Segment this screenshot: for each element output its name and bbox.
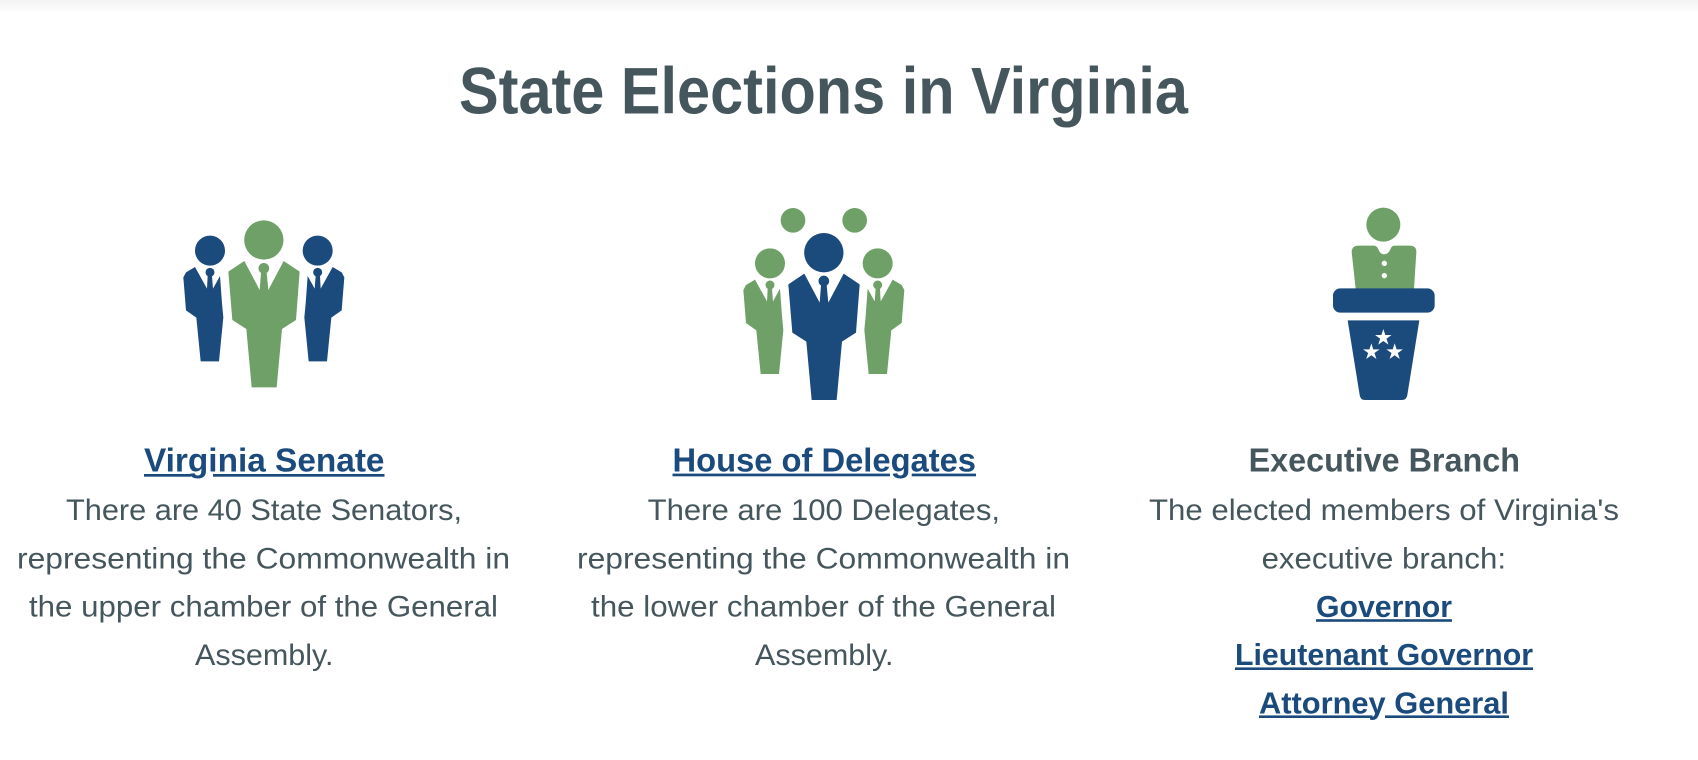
link: Governor: Governor — [1316, 589, 1452, 624]
heading: Virginia Senate link: Virginia Senate — [144, 442, 384, 479]
link: Attorney General: Attorney General — [1259, 685, 1509, 720]
text: House description — [577, 494, 1070, 672]
text: Senate description: the upper chamber of the General — [29, 591, 498, 624]
heading: House of Delegates link: House of Delegates — [672, 442, 976, 479]
heading: Executive Branch: Executive Branch — [1249, 442, 1520, 479]
text: House description: the lower chamber of the General — [591, 591, 1056, 624]
icon: speaker at podium — [1333, 208, 1435, 400]
icon: delegates group — [743, 208, 904, 400]
text: Executive description — [1149, 494, 1619, 575]
text: Senate description: Assembly. — [195, 639, 334, 672]
text: Senate description: There are 40 State Senators, — [66, 494, 462, 527]
panel: Executive Branch — [1149, 208, 1619, 720]
panel: House of Delegates — [577, 208, 1070, 672]
text: Executive description: executive branch: — [1262, 542, 1506, 575]
text: House description: There are 100 Delegates, — [648, 494, 1000, 527]
text: House description: representing the Commonwealth in — [577, 542, 1070, 575]
text: Executive description: The elected members of Virginia's — [1149, 494, 1619, 527]
text: Senate description: representing the Commonwealth in — [17, 542, 510, 575]
text: House description: Assembly. — [755, 639, 894, 672]
link: Lieutenant Governor: Lieutenant Governor — [1235, 637, 1533, 672]
icon: three senators — [183, 220, 344, 387]
panel: Virginia Senate — [17, 220, 510, 672]
title: State Elections in Virginia — [459, 54, 1189, 128]
text: Senate description — [17, 494, 510, 672]
